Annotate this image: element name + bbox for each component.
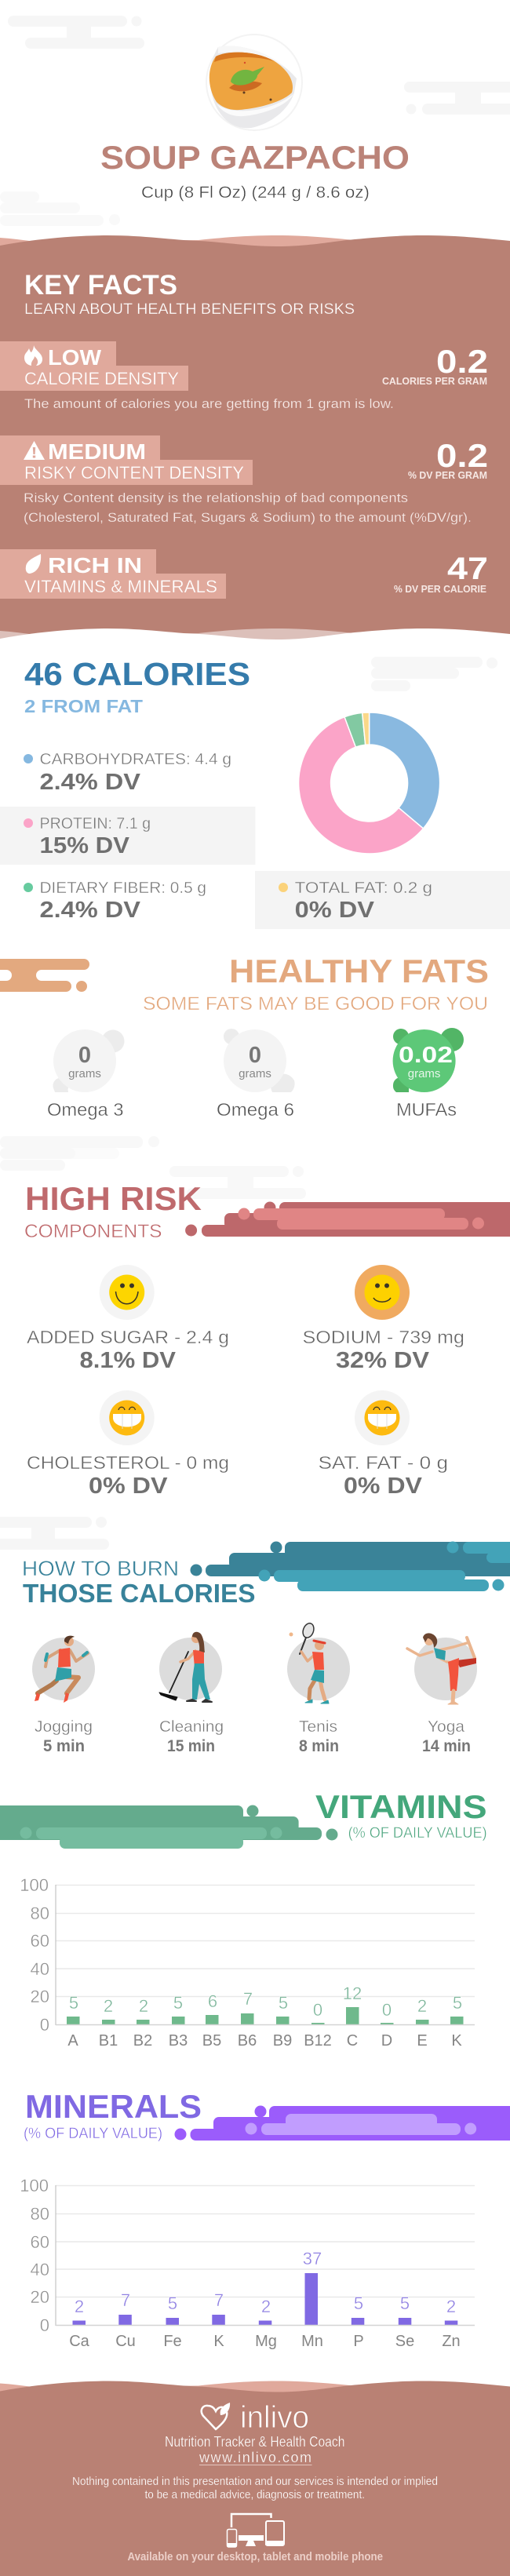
icon: cleaner with broom <box>159 1632 212 1702</box>
burn heading line 2: THOSE CALORIES <box>23 1579 256 1609</box>
bar chart: minerals: P <box>353 2333 364 2350</box>
risk: cholesterol <box>27 1390 229 1499</box>
website link: www.inlivo.com <box>199 2450 311 2465</box>
icon: leaf <box>26 554 41 574</box>
fact: medium risky content density <box>0 435 488 525</box>
fact: rich in vitamins and minerals <box>0 549 488 599</box>
description <box>24 491 472 525</box>
bar chart: minerals: Fe <box>163 2333 182 2350</box>
activity: yoga <box>407 1633 477 1755</box>
bar chart: minerals: Se <box>395 2333 414 2350</box>
risk: added sugar: ADDED SUGAR - 2.4 g <box>27 1327 229 1347</box>
serving size subtitle: Cup (8 Fl Oz) (244 g / 8.6 oz) <box>141 184 370 202</box>
bar chart: vitamins: 20 <box>31 1987 49 2006</box>
value: dv per gram: 0.2 <box>436 437 488 474</box>
icon: grin <box>109 1400 144 1436</box>
risk: sodium: SODIUM - 739 mg <box>303 1327 464 1347</box>
icon: flame <box>24 345 42 366</box>
label: low: LOW <box>48 345 102 370</box>
activity: yoga: Yoga <box>428 1718 465 1736</box>
label: calorie density: CALORIE DENSITY <box>24 369 179 388</box>
bar chart: vitamins: C <box>347 2032 358 2050</box>
bar chart: minerals: Mg <box>255 2333 277 2350</box>
risk: sodium: 32% DV <box>336 1348 430 1373</box>
bar chart: vitamins: 60 <box>31 1931 49 1951</box>
label: rich in: RICH IN <box>48 553 142 578</box>
label: risky content density: RISKY CONTENT DENSITY <box>24 463 244 483</box>
background clouds, high risk <box>0 1136 306 1199</box>
background cloud, burn calories <box>0 1517 109 1550</box>
healthy fats subheading: SOME FATS MAY BE GOOD FOR YOU <box>143 993 488 1015</box>
macro: total fat: 0% DV <box>295 898 375 923</box>
bar chart: minerals: 20 <box>31 2287 49 2307</box>
fat: mufas <box>393 1028 464 1120</box>
macro: carbohydrates <box>24 750 231 795</box>
icon: devices <box>227 2514 284 2547</box>
from fat subheading: 2 FROM FAT <box>24 696 143 716</box>
risk: saturated fat <box>319 1390 448 1499</box>
bar chart: vitamins: B5 <box>202 2032 221 2050</box>
bar chart: vitamins: A <box>67 2032 78 2050</box>
disclaimer: Nothing contained in this presentation and our services is intended or implied <box>72 2475 438 2488</box>
bar chart: minerals: 0 <box>40 2315 49 2335</box>
fat: omega 6 <box>217 1029 295 1120</box>
fact: low calorie density <box>0 341 488 411</box>
risk: added sugar <box>27 1265 229 1373</box>
donut chart: macronutrients <box>299 712 440 854</box>
bar chart: minerals: 2 <box>75 2297 84 2316</box>
fat: mufas: 0.02 <box>399 1043 453 1068</box>
burn heading line 1: HOW TO BURN <box>22 1557 179 1580</box>
bar chart: minerals: 100 <box>20 2176 49 2195</box>
risk: added sugar: 8.1% DV <box>80 1348 177 1373</box>
bar chart: minerals: 5 <box>168 2294 177 2313</box>
bar chart: vitamins: 7 <box>243 1989 253 2009</box>
disclaimer <box>72 2475 438 2501</box>
macro: protein: PROTEIN: 7.1 g <box>39 814 151 833</box>
fat: omega 3: Omega 3 <box>47 1099 124 1120</box>
bar chart: vitamins: 6 <box>208 1991 217 2011</box>
bar chart: vitamins: 80 <box>31 1904 49 1923</box>
minerals heading: MINERALS <box>25 2088 202 2125</box>
bar chart: vitamins: 5 <box>69 1993 78 2013</box>
bar chart: minerals: K <box>213 2333 224 2350</box>
fat: mufas: grams <box>408 1067 440 1080</box>
food image: soup bowl <box>206 34 303 131</box>
fat: omega 3: 0 <box>78 1043 91 1068</box>
logo: inlivo <box>202 2400 309 2435</box>
activity: tennis: Tenis <box>299 1718 337 1736</box>
risk: saturated fat: 0% DV <box>344 1474 423 1499</box>
healthy fats heading: HEALTHY FATS <box>229 953 489 989</box>
background cloud, calories <box>371 657 497 691</box>
bar chart: vitamins: B6 <box>238 2032 257 2050</box>
bar chart: vitamins: 0 <box>313 2000 322 2020</box>
macro: dietary fiber <box>24 879 206 923</box>
bar chart: minerals: 7 <box>121 2290 130 2310</box>
macro: protein: 15% DV <box>39 833 130 858</box>
risk: saturated fat: SAT. FAT - 0 g <box>319 1452 448 1473</box>
fat: omega 6: grams <box>239 1067 271 1080</box>
bar chart: minerals: 60 <box>31 2232 49 2252</box>
icon: jogger <box>35 1636 88 1703</box>
banner: minerals <box>174 2106 510 2141</box>
macro: protein <box>24 814 151 858</box>
bar chart: vitamins: 100 <box>20 1875 49 1895</box>
activity: jogging: Jogging <box>35 1718 93 1736</box>
key facts subheading: LEARN ABOUT HEALTH BENEFITS OR RISKS <box>24 301 355 318</box>
highlight panel: total fat <box>255 871 510 929</box>
bar chart: vitamins: 5 <box>453 1993 462 2013</box>
description: (Cholesterol, Saturated Fat, Sugars & Sodium) to the amount (%DV/gr). <box>24 511 472 525</box>
bar chart: vitamins: B2 <box>133 2032 152 2050</box>
disclaimer: to be a medical advice, diagnosis or treatment. <box>144 2488 365 2501</box>
activity: jogging <box>32 1636 95 1755</box>
bar chart: vitamins: 5 <box>279 1993 288 2013</box>
risk: cholesterol: CHOLESTEROL - 0 mg <box>27 1452 229 1473</box>
value caption: CALORIES PER GRAM <box>382 375 487 387</box>
value: calories per gram: 0.2 <box>436 343 488 380</box>
bar chart: vitamins: 2 <box>104 1996 113 2016</box>
banner: healthy fats cloud <box>0 959 89 992</box>
macro: dietary fiber: DIETARY FIBER: 0.5 g <box>39 879 206 897</box>
high risk heading: HIGH RISK <box>25 1180 202 1217</box>
icon: grin <box>364 1400 400 1436</box>
highlight panel: protein row <box>0 807 256 865</box>
bar chart: minerals: 7 <box>214 2290 224 2310</box>
availability note: Available on your desktop, tablet and mobile phone <box>127 2550 383 2563</box>
logo: inlivo: inlivo <box>240 2400 309 2435</box>
minerals subheading: (% OF DAILY VALUE) <box>24 2126 162 2142</box>
risk: sodium <box>303 1265 464 1373</box>
bar chart: minerals: Zn <box>442 2333 461 2350</box>
risk: cholesterol: 0% DV <box>89 1474 168 1499</box>
key facts heading: KEY FACTS <box>24 270 177 301</box>
bar chart: vitamins: 0 <box>40 2015 49 2035</box>
bar chart: vitamins: B3 <box>169 2032 188 2050</box>
bar chart: minerals: Ca <box>69 2333 90 2350</box>
bar chart: minerals: 5 <box>400 2294 410 2313</box>
activity: cleaning <box>159 1632 224 1755</box>
bar chart: vitamins: 2 <box>417 1996 427 2016</box>
description: Risky Content density is the relationship of bad components <box>24 491 408 505</box>
icon: tennis player <box>289 1622 329 1703</box>
bar chart: minerals: 37 <box>303 2249 322 2268</box>
icon: yoga pose <box>407 1633 476 1704</box>
value: dv per calorie: 47 <box>447 552 488 586</box>
high risk subheading: COMPONENTS <box>24 1221 162 1242</box>
macro: carbohydrates: CARBOHYDRATES: 4.4 g <box>39 750 231 768</box>
value caption: % DV PER CALORIE <box>394 583 486 595</box>
bar chart: vitamins <box>20 1875 475 2050</box>
bar chart: vitamins: B1 <box>99 2032 118 2050</box>
bar chart: vitamins: 12 <box>343 1984 362 2003</box>
tagline: Nutrition Tracker & Health Coach <box>165 2434 345 2450</box>
activity: tennis <box>287 1622 350 1755</box>
label: vitamins and minerals: VITAMINS & MINERALS <box>24 577 217 596</box>
banner: vitamins <box>0 1805 337 1849</box>
fat: mufas: MUFAs <box>396 1099 457 1120</box>
bar chart: vitamins: 0 <box>382 2000 392 2020</box>
macro: total fat: TOTAL FAT: 0.2 g <box>295 879 432 897</box>
macro: total fat <box>279 879 432 923</box>
bar chart: minerals: Mn <box>301 2333 323 2350</box>
macro: dietary fiber: 2.4% DV <box>39 898 141 923</box>
panel: footer <box>0 2381 510 2576</box>
bar chart: minerals: 2 <box>446 2297 456 2316</box>
title: SOUP GAZPACHO <box>100 139 410 176</box>
bar chart: minerals: Cu <box>115 2333 136 2350</box>
bar chart: minerals: 40 <box>31 2260 49 2279</box>
bar chart: vitamins: D <box>381 2032 392 2050</box>
icon: warning triangle <box>24 441 45 460</box>
fat: omega 6: Omega 6 <box>217 1099 294 1120</box>
bar chart: vitamins: B12 <box>304 2032 332 2050</box>
value caption: % DV PER GRAM <box>408 469 487 481</box>
bar chart: vitamins: K <box>451 2032 462 2050</box>
bar chart: vitamins: B9 <box>273 2032 292 2050</box>
banner: high risk <box>185 1202 510 1237</box>
bar chart: vitamins: 2 <box>139 1996 148 2016</box>
bar chart: vitamins: 40 <box>31 1959 49 1979</box>
vitamins heading: VITAMINS <box>315 1788 487 1825</box>
bar chart: minerals: 80 <box>31 2204 49 2224</box>
macro: carbohydrates: 2.4% DV <box>39 770 141 795</box>
bar chart: minerals <box>20 2176 475 2350</box>
activity: cleaning: Cleaning <box>159 1718 224 1736</box>
bar chart: vitamins: 5 <box>173 1993 183 2013</box>
icon: smile big <box>109 1274 144 1310</box>
activity: cleaning: 15 min <box>167 1737 215 1755</box>
banner: burn calories <box>190 1541 510 1591</box>
fat: omega 3 <box>47 1029 124 1120</box>
background clouds, header <box>0 16 510 226</box>
bar chart: minerals: 2 <box>261 2297 271 2316</box>
fat: omega 3: grams <box>68 1067 101 1080</box>
activity: yoga: 14 min <box>422 1737 471 1755</box>
icon: smile <box>364 1274 400 1310</box>
bar chart: vitamins: E <box>417 2032 428 2050</box>
bar chart: minerals: 5 <box>354 2294 363 2313</box>
vitamins subheading: (% OF DAILY VALUE) <box>348 1825 487 1842</box>
fat: omega 6: 0 <box>249 1043 261 1068</box>
panel: key facts <box>0 235 510 656</box>
label: medium: MEDIUM <box>48 439 146 464</box>
description: The amount of calories you are getting from 1 gram is low. <box>24 397 394 411</box>
calories heading: 46 CALORIES <box>24 656 250 692</box>
activity: jogging: 5 min <box>43 1737 85 1755</box>
activity: tennis: 8 min <box>299 1737 339 1755</box>
